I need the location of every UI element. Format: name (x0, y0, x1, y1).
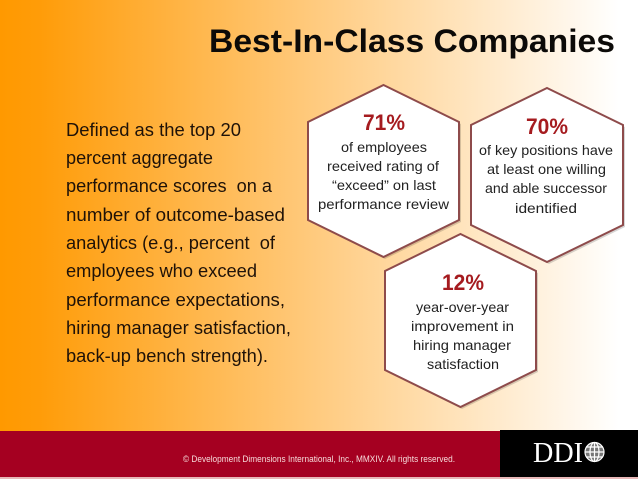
hexagon 3 text: year-over-year (416, 299, 509, 315)
title: Best-In-Class Companies (209, 23, 615, 59)
stat: 70%: 70% (526, 114, 568, 139)
hexagon 1 text: performance review (318, 196, 450, 212)
hexagon 1 text: of employees (341, 139, 427, 155)
hexagon 1 text (318, 139, 450, 212)
copyright text: © Development Dimensions International, Inc., MMXIV. All rights reserved. (183, 454, 455, 464)
stat: 71%: 71% (363, 110, 405, 135)
logo panel (500, 430, 638, 477)
icon: globe (585, 442, 604, 462)
description text block: hiring manager satisfaction, (66, 318, 291, 338)
hexagon 2 text: of key positions have (479, 142, 613, 158)
description text block: performance scores on a (66, 176, 273, 196)
hexagon 1 text: received rating of (327, 158, 439, 174)
hexagon 2 text: and able successor (485, 180, 607, 196)
hexagon 3 text (411, 299, 514, 372)
description text block: back-up bench strength). (66, 346, 268, 366)
hexagon 2 text (479, 142, 613, 216)
hexagon: 71% of employees (308, 85, 461, 259)
description text block: employees who exceed (66, 261, 257, 281)
hexagon: 12% year-over-year (385, 234, 538, 409)
description text block: analytics (e.g., percent of (66, 233, 276, 253)
description text block (66, 120, 291, 366)
hexagon 3 text: improvement in (411, 318, 514, 334)
hexagon 2 text: identified (515, 200, 577, 216)
hexagon: 70% of key positions (471, 88, 625, 264)
description text block: performance expectations, (66, 290, 285, 310)
description text block: number of outcome-based (66, 205, 285, 225)
hexagon 3 text: hiring manager (413, 337, 511, 353)
description text block: Defined as the top 20 (66, 120, 241, 140)
stat: 12%: 12% (442, 270, 484, 295)
hexagon 2 text: at least one willing (487, 161, 606, 177)
hexagon 3 text: satisfaction (427, 356, 499, 372)
DDI wordmark: DDI (533, 438, 583, 469)
description text block: percent aggregate (66, 148, 213, 168)
hexagon 1 text: “exceed” on last (332, 177, 436, 193)
footer bar (0, 430, 638, 479)
